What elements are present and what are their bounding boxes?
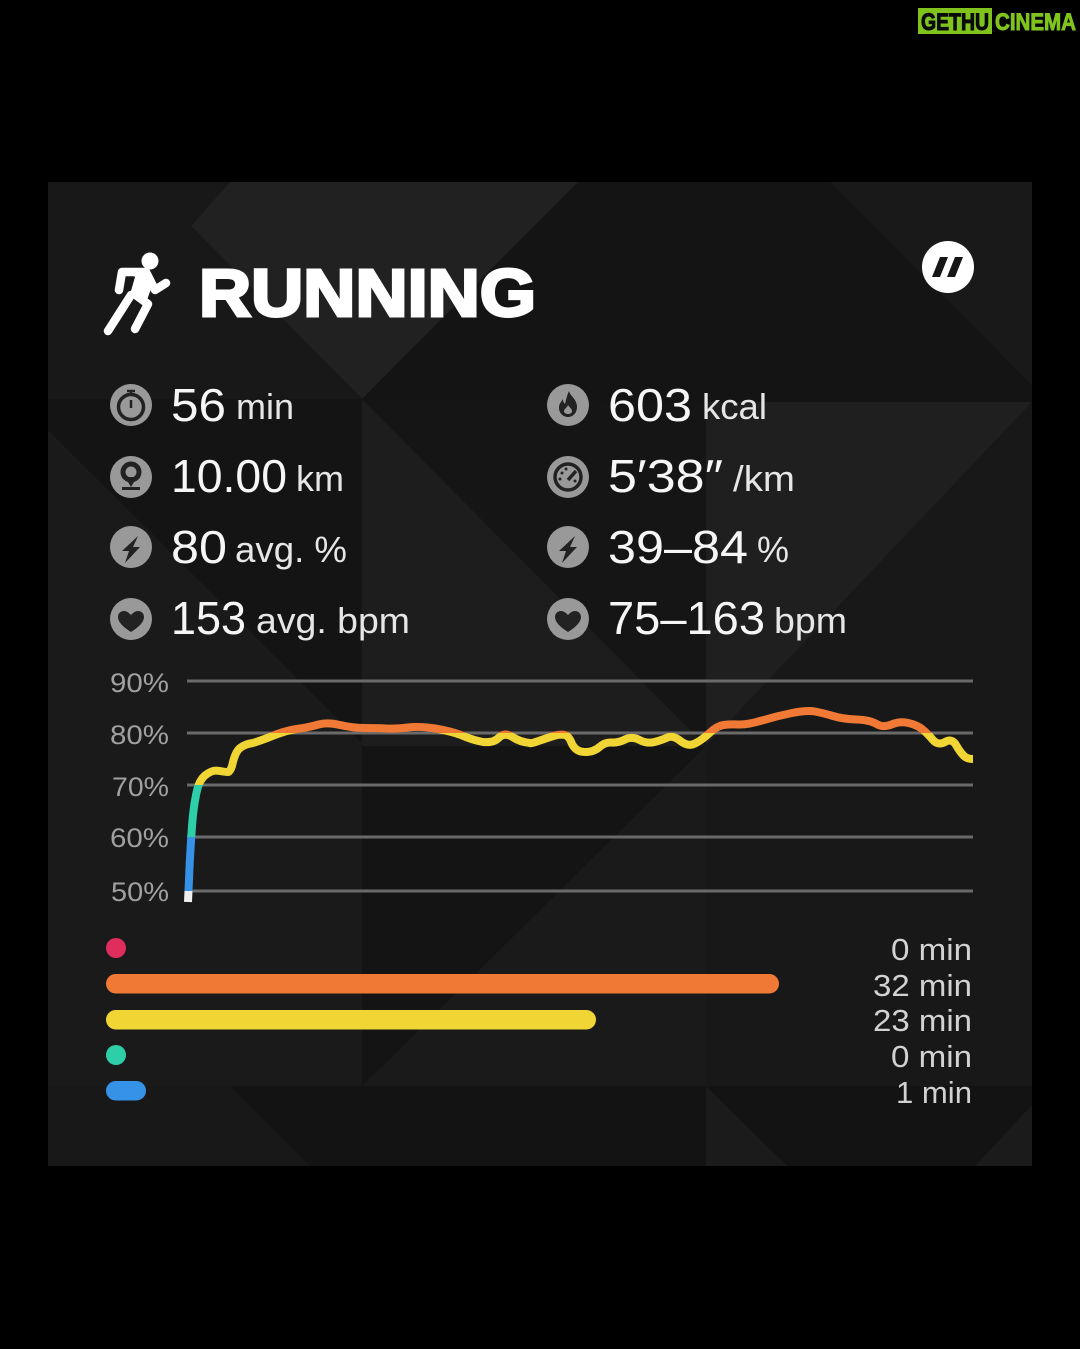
stat: heart rate range: bpm (774, 600, 847, 641)
stat: average intensity: avg. % (235, 529, 347, 570)
stat: average heart rate: avg. bpm (256, 600, 410, 641)
icon: heart (110, 598, 152, 640)
stat: calories (547, 379, 767, 431)
zone labels: 1 min (896, 1075, 972, 1110)
stat: average heart rate: 153 (171, 592, 246, 644)
stat: heart rate range: 75–163 (608, 592, 765, 644)
zone labels: 0 min (891, 1039, 972, 1074)
icon: flame (547, 384, 589, 426)
axis labels (110, 668, 169, 907)
zone labels: 32 min (873, 968, 972, 1003)
curve (188, 711, 973, 902)
zone labels (873, 932, 972, 1110)
zone: blue (106, 1081, 146, 1100)
zone bars (106, 932, 972, 1110)
stat: duration (110, 379, 294, 431)
stat: distance: 10.00 (171, 450, 287, 502)
stat: distance: km (296, 458, 344, 499)
zone labels: 0 min (891, 932, 972, 967)
stat: pace: 5′38″ (608, 450, 723, 502)
line chart: intensity over time (110, 668, 973, 907)
zone: teal (106, 1045, 126, 1065)
stat: intensity range: % (757, 529, 789, 570)
zone labels: 23 min (873, 1003, 972, 1038)
stat: pace (547, 450, 795, 502)
stat: distance (110, 450, 344, 502)
icon: location pin (110, 456, 152, 498)
title: RUNNING (199, 256, 536, 331)
axis labels: 70% (112, 772, 169, 802)
icon: runner (108, 252, 166, 331)
stat: calories: 603 (608, 379, 692, 431)
axis labels: 90% (110, 668, 169, 698)
axis labels: 60% (110, 823, 169, 853)
stat: duration: 56 (171, 379, 226, 431)
stat: pace: /km (733, 458, 795, 499)
stat: average intensity (110, 521, 347, 573)
stat: intensity range: 39–84 (608, 521, 748, 573)
axis labels: 80% (110, 720, 169, 750)
stat: intensity range (547, 521, 789, 573)
icon: heart (547, 598, 589, 640)
stat: heart rate range (547, 592, 847, 644)
watermark: Gethu Cinema: GETHU (921, 9, 989, 36)
icon: brand logo (922, 241, 974, 293)
icon: speedometer (547, 456, 589, 498)
zone: red (106, 938, 126, 958)
zone: yellow (106, 1010, 596, 1030)
icon: lightning bolt (110, 526, 152, 568)
watermark: Gethu Cinema (918, 8, 1076, 36)
stat: average intensity: 80 (171, 521, 227, 573)
icon: stopwatch (110, 384, 152, 426)
icon: lightning bolt (547, 526, 589, 568)
stat: calories: kcal (702, 386, 767, 427)
stat: duration: min (236, 386, 294, 427)
panel: running card (48, 182, 1032, 1166)
stat: average heart rate (110, 592, 410, 644)
axis labels: 50% (111, 877, 169, 907)
zone: orange (106, 974, 779, 994)
